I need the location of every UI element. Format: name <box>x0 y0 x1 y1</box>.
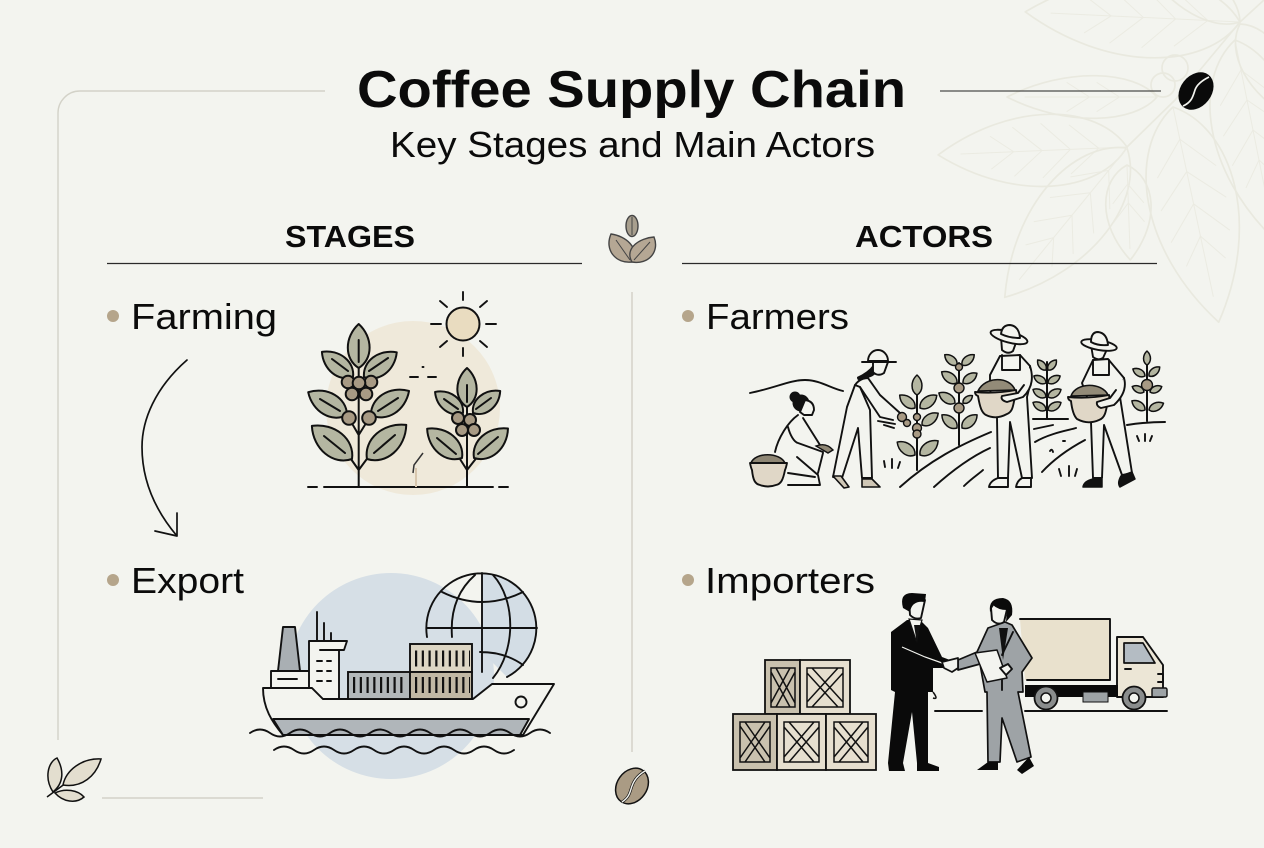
illustration: importers deal <box>733 593 1167 774</box>
truck <box>935 619 1167 711</box>
icon: leaf sprig, bottom left <box>47 758 101 801</box>
figure: farmer walking with basket <box>1068 332 1135 487</box>
plant A <box>894 375 942 470</box>
bottom rule <box>102 797 263 799</box>
waves <box>250 730 550 736</box>
item: Export: Export <box>131 560 244 601</box>
watermark: coffee branch <box>937 0 1264 331</box>
ship hull <box>263 684 554 735</box>
heading: stages: STAGES <box>285 219 415 254</box>
plant C <box>1031 358 1068 419</box>
ship superstructure <box>271 612 347 699</box>
hill and field lines <box>750 380 1152 487</box>
illustration: farmers harvesting <box>750 325 1165 488</box>
heading: actors: ACTORS <box>855 219 993 254</box>
plant: large <box>303 324 415 487</box>
item: Importers: Importers <box>705 560 875 601</box>
figure: businessman in black suit <box>888 593 950 771</box>
title: Coffee Supply Chain <box>357 61 906 119</box>
subtitle: Key Stages and Main Actors <box>390 124 875 165</box>
plant B <box>936 352 980 445</box>
item: Farming: Farming <box>131 296 277 337</box>
actors rule <box>682 262 1157 264</box>
plant D <box>1127 351 1165 425</box>
illustration: cargo ship and globe <box>250 573 554 779</box>
crates <box>733 660 876 770</box>
icon: center leaves <box>609 216 656 262</box>
icon: globe <box>426 573 537 678</box>
title rule <box>940 90 1161 92</box>
figure: kneeling woman with basket <box>750 392 833 486</box>
icon: sun <box>431 292 496 356</box>
center divider <box>631 292 633 752</box>
plant: small <box>420 368 515 487</box>
shipping containers <box>348 644 472 699</box>
icon: coffee bean, top right <box>1171 65 1221 117</box>
outer frame line <box>58 91 325 740</box>
item: Farmers: Farmers <box>706 296 849 337</box>
icon: coffee bean, bottom center <box>609 762 655 810</box>
illustration: coffee plants and sun <box>303 292 515 495</box>
figure: woman picking <box>833 350 900 488</box>
stages rule <box>107 262 582 264</box>
figure: farmer with basket <box>975 325 1032 487</box>
arrow: farming to export <box>142 360 187 536</box>
figure: businessman in grey suit with clipboard <box>942 598 1034 774</box>
